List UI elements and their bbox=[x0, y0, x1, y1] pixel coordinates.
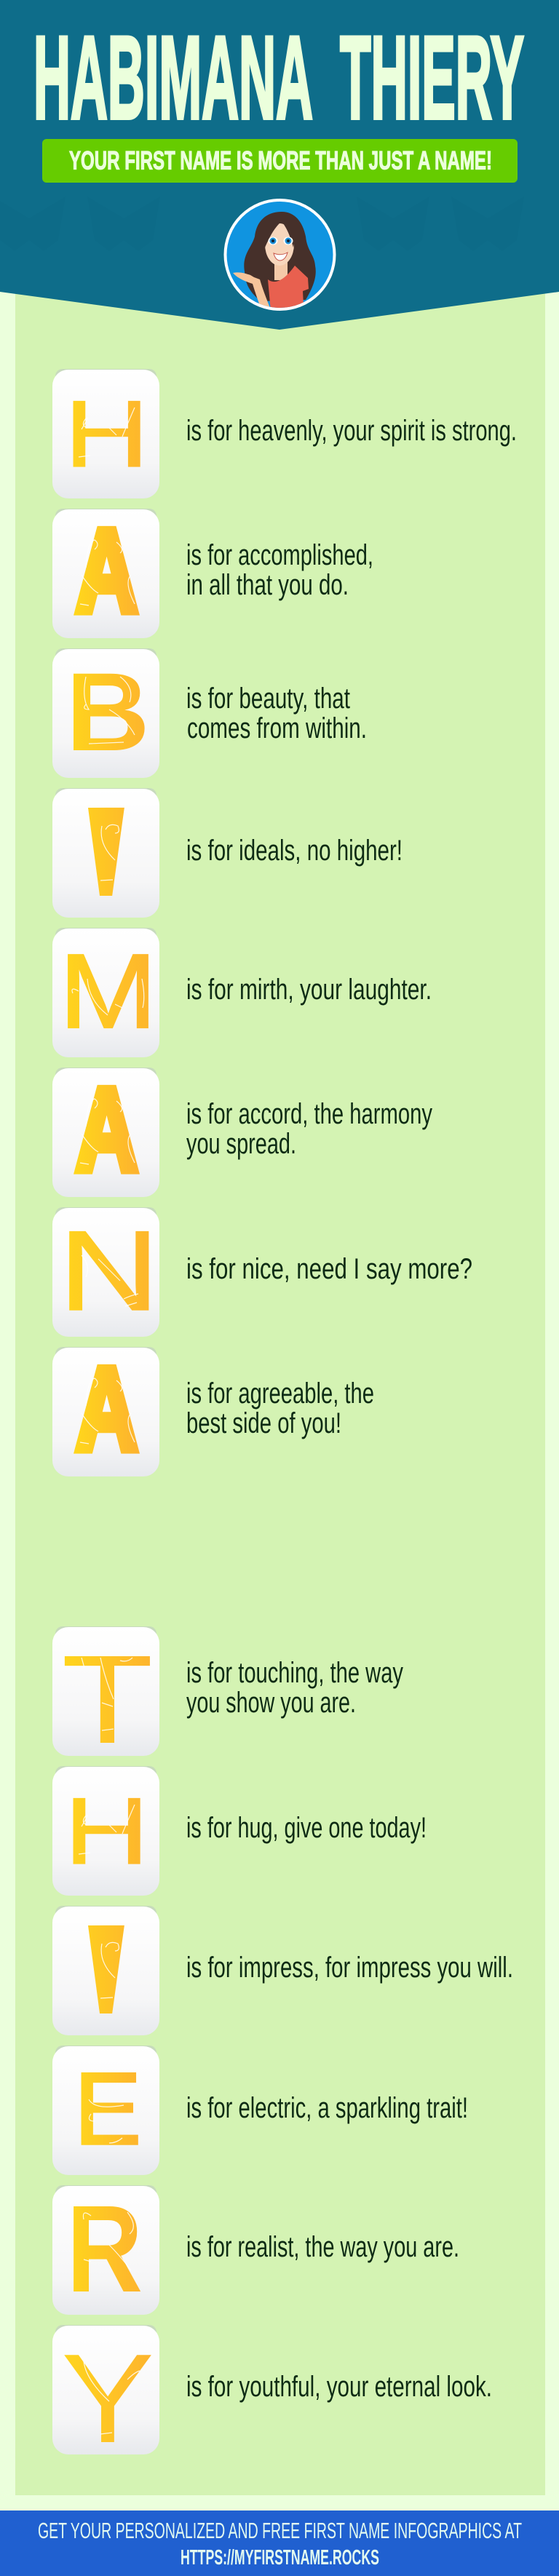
tile bbox=[52, 789, 159, 918]
row: R bbox=[52, 2180, 459, 2318]
footer bbox=[0, 2511, 559, 2576]
description: is for touching, the way bbox=[186, 1657, 403, 1689]
description: is for beauty, that bbox=[186, 683, 350, 715]
description: best side of you! bbox=[186, 1407, 341, 1439]
avatar: cartoon woman in circle bbox=[226, 200, 335, 311]
tile bbox=[52, 1068, 159, 1197]
tile bbox=[52, 509, 159, 638]
letter N: N bbox=[58, 1208, 159, 1335]
row: N bbox=[52, 1207, 472, 1337]
letter H: H bbox=[64, 381, 149, 487]
letter E: E bbox=[74, 2052, 141, 2166]
row: A bbox=[52, 1344, 374, 1476]
letter I: I bbox=[70, 1898, 143, 2041]
tile bbox=[52, 1907, 159, 2035]
row: A bbox=[52, 1065, 432, 1197]
tile bbox=[52, 2186, 159, 2315]
row: Y bbox=[52, 2325, 492, 2469]
row: H bbox=[52, 1766, 427, 1896]
description: comes from within. bbox=[187, 712, 367, 744]
letter I bbox=[88, 1925, 124, 2014]
letter H: H bbox=[64, 1778, 149, 1884]
row: H bbox=[52, 369, 517, 498]
tile bbox=[52, 1627, 159, 1756]
letter T: T bbox=[61, 1629, 154, 1770]
row: B bbox=[52, 648, 367, 778]
tile bbox=[52, 929, 159, 1057]
tile bbox=[52, 1348, 159, 1476]
description: is for agreeable, the bbox=[186, 1378, 374, 1410]
tagline bar bbox=[42, 139, 518, 183]
letter A: A bbox=[76, 1344, 138, 1475]
row: T bbox=[52, 1626, 403, 1770]
description: you spread. bbox=[186, 1128, 296, 1160]
tile bbox=[52, 649, 159, 778]
row: A bbox=[52, 506, 373, 638]
letter B: B bbox=[66, 650, 150, 774]
description bbox=[186, 1657, 403, 1719]
description: is for nice, need I say more? bbox=[186, 1253, 472, 1285]
letter A: A bbox=[76, 1065, 138, 1196]
tile bbox=[52, 370, 159, 498]
letter I bbox=[88, 808, 124, 896]
description: is for accomplished, bbox=[186, 539, 373, 571]
description bbox=[186, 1098, 432, 1160]
row: I bbox=[52, 1898, 513, 2041]
letter I: I bbox=[70, 780, 143, 923]
description: is for mirth, your laughter. bbox=[186, 974, 432, 1006]
description bbox=[186, 683, 367, 744]
description: is for ideals, no higher! bbox=[186, 835, 403, 867]
tile bbox=[52, 2326, 159, 2454]
footer url: HTTPS://MYFIRSTNAME.ROCKS bbox=[181, 2546, 379, 2569]
tile bbox=[52, 2046, 159, 2175]
description: you show you are. bbox=[186, 1687, 356, 1719]
letter A: A bbox=[76, 506, 138, 637]
description bbox=[186, 539, 373, 601]
letter Y: Y bbox=[61, 2327, 154, 2469]
letter R: R bbox=[66, 2180, 143, 2318]
description: is for realist, the way you are. bbox=[186, 2231, 459, 2263]
description: is for accord, the harmony bbox=[186, 1098, 432, 1130]
header banner bbox=[0, 0, 559, 330]
letter M: M bbox=[59, 932, 157, 1050]
tile bbox=[52, 1208, 159, 1337]
description: in all that you do. bbox=[186, 569, 349, 601]
row: M bbox=[52, 928, 432, 1057]
tile bbox=[52, 1767, 159, 1896]
row: E bbox=[52, 2046, 468, 2175]
description bbox=[186, 1378, 374, 1439]
description: is for hug, give one today! bbox=[186, 1812, 427, 1844]
row: I bbox=[52, 788, 400, 918]
